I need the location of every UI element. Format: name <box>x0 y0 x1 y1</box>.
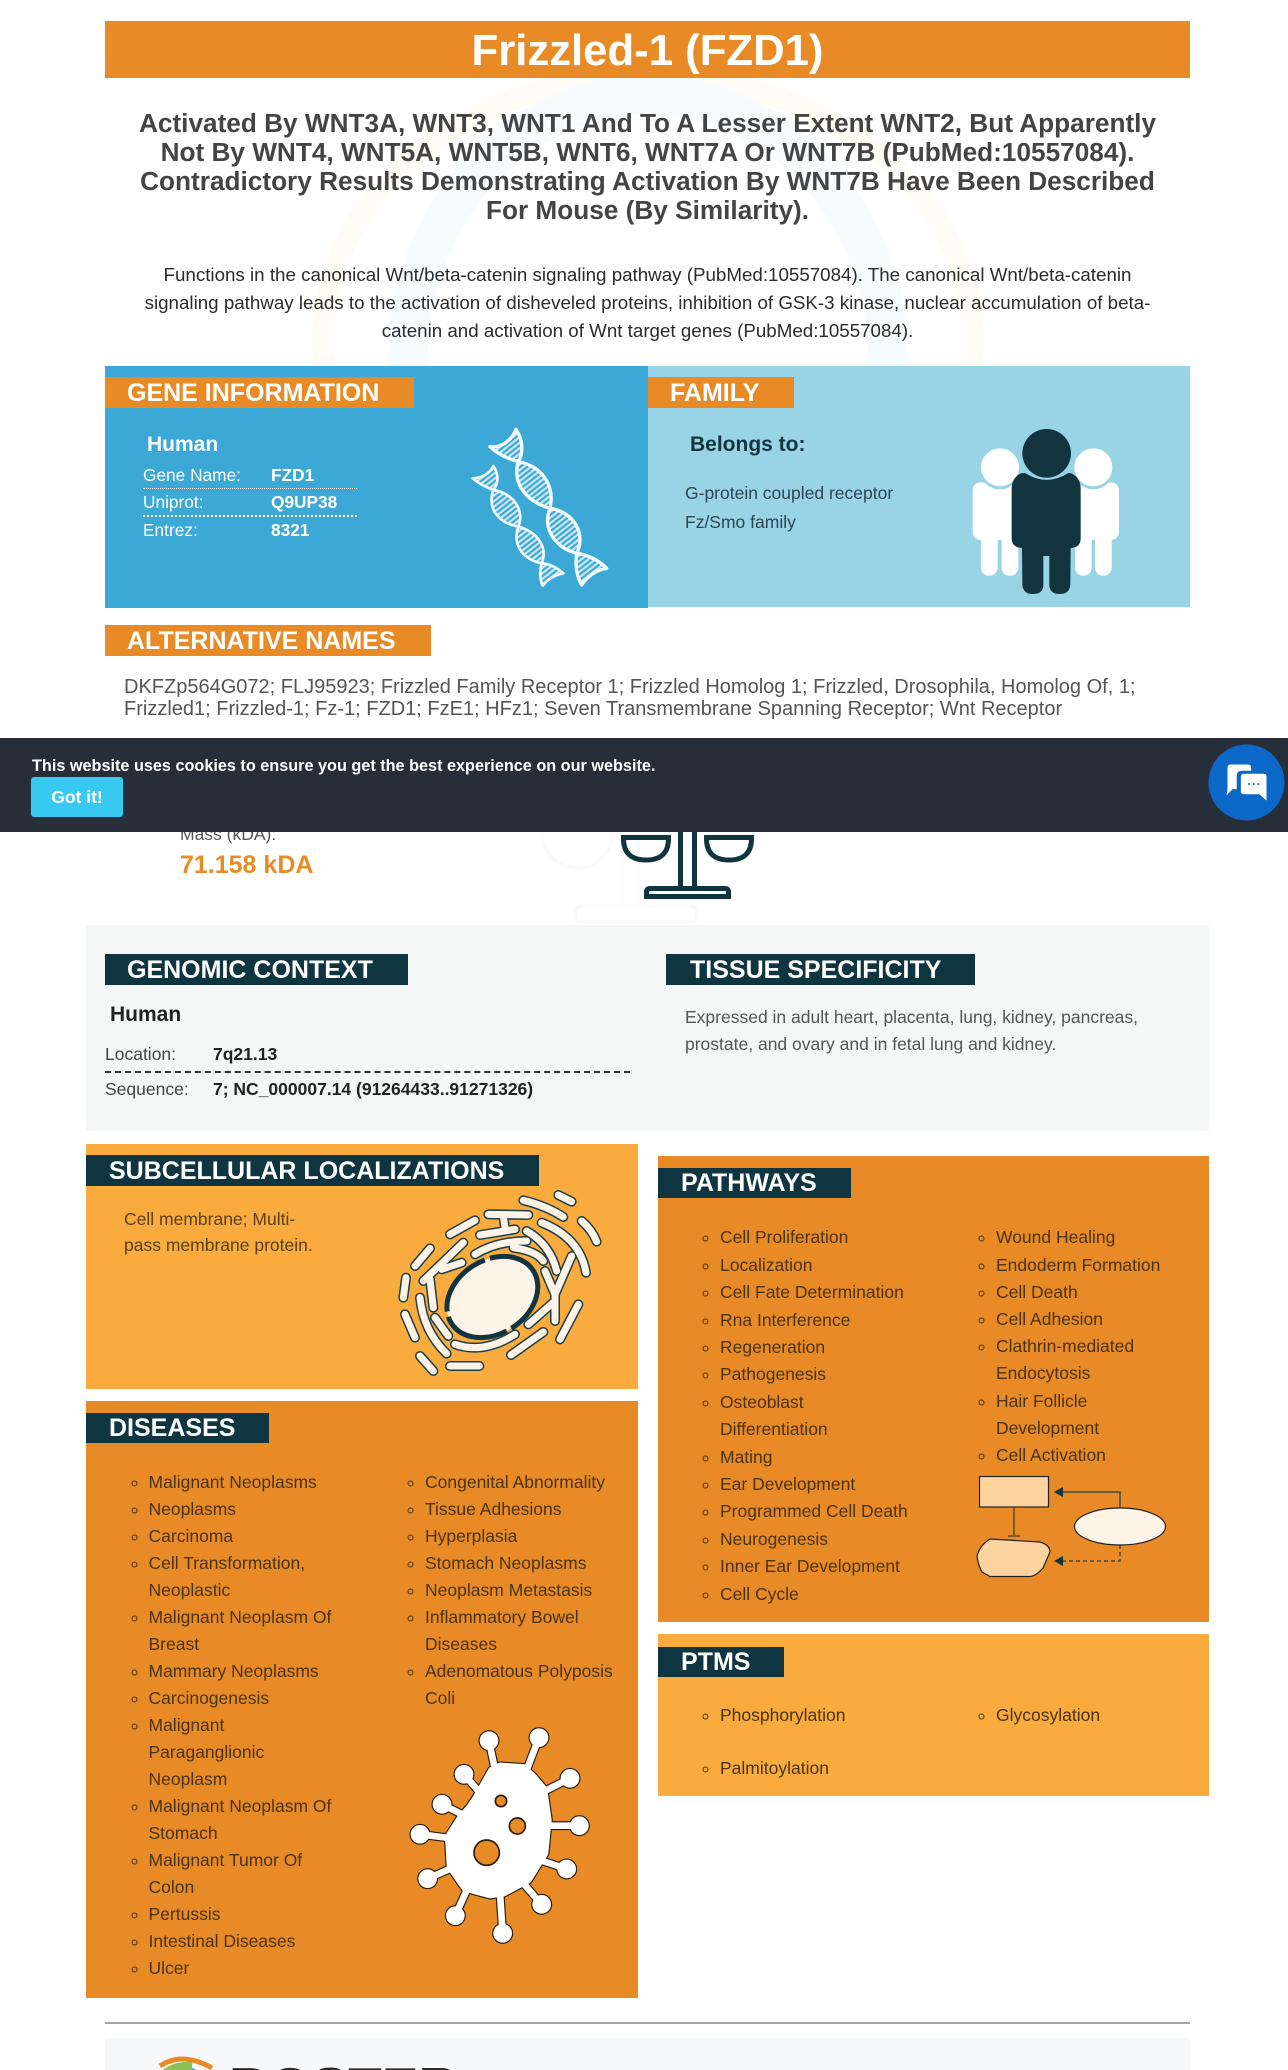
icon: endoplasmic reticulum and nucleus <box>398 1190 602 1376</box>
uniprot row: Q9UP38 <box>271 492 337 512</box>
disease list column one: Ulcer <box>148 1958 189 1978</box>
PTM list column one <box>702 1705 846 1778</box>
pathway list column one <box>702 1227 908 1604</box>
family list: G-protein coupled receptor <box>685 483 893 503</box>
background watermark logo <box>312 78 984 366</box>
disease list column two: Diseases <box>425 1634 497 1654</box>
pathway list column one: Regeneration <box>720 1337 825 1357</box>
panel: PTMs <box>658 1634 1209 1796</box>
panel: diseases <box>86 1401 638 1998</box>
pathway list column two: Cell Adhesion <box>996 1309 1103 1329</box>
cookie message: This website uses cookies to ensure you get the best experience on our website. <box>32 757 655 775</box>
pathway list column two <box>978 1227 1160 1465</box>
pathway list column two: Cell Activation <box>996 1445 1106 1465</box>
disease list column one: Neoplastic <box>148 1580 230 1600</box>
heading: gene information: GENE INFORMATION <box>127 379 379 407</box>
heading: pathways: PATHWAYS <box>681 1169 817 1197</box>
sequence row <box>105 1071 630 1105</box>
pathway list column two: Endoderm Formation <box>996 1254 1160 1274</box>
family list: Fz/Smo family <box>685 512 796 532</box>
heading: PTMs: PTMS <box>681 1648 750 1676</box>
heading: family <box>648 377 794 408</box>
gene name row: FZD1 <box>271 465 314 485</box>
alternative names text <box>124 676 1136 720</box>
disease list column one: Malignant Neoplasm Of <box>148 1796 331 1816</box>
molecular mass value: 71.158 kDA <box>180 851 313 879</box>
icon: company logo <box>158 2056 214 2070</box>
disease list column one: Paraganglionic <box>148 1742 264 1762</box>
subtitle heading: For Mouse (By Similarity). <box>486 195 809 225</box>
disease list column two <box>408 1472 613 1708</box>
PTM list column one: Palmitoylation <box>720 1758 829 1778</box>
heading: pathways <box>658 1168 851 1198</box>
pathway list column two: Endocytosis <box>996 1363 1090 1383</box>
pathway list column one: Cell Cycle <box>720 1584 799 1604</box>
uniprot row: Uniprot: <box>143 492 204 512</box>
disease list column one: Intestinal Diseases <box>148 1931 295 1951</box>
icon: faint balance watermark <box>530 800 730 930</box>
panel: gene information <box>105 366 648 608</box>
disease list column one: Colon <box>148 1877 194 1897</box>
species label: Human <box>110 1003 181 1026</box>
description paragraph: catenin and activation of Wnt target genes (PubMed:10557084). <box>382 320 913 341</box>
pathway list column two: Development <box>996 1418 1099 1438</box>
heading: PTMs <box>658 1647 784 1677</box>
icon: chat bubble <box>1208 744 1284 820</box>
disease list column one: Breast <box>148 1634 199 1654</box>
footer divider <box>105 2022 1190 2024</box>
gene name row: Gene Name: <box>143 465 241 485</box>
panel: subcellular localizations <box>86 1144 638 1389</box>
disease list column two: Tissue Adhesions <box>425 1499 562 1519</box>
pathway list column two: Cell Death <box>996 1282 1078 1302</box>
disease list column two: Congenital Abnormality <box>425 1472 605 1492</box>
location row: Location: <box>105 1044 176 1064</box>
disease list column one: Malignant Neoplasm Of <box>148 1607 331 1627</box>
icon: virus <box>410 1727 590 1944</box>
disease list column two: Neoplasm Metastasis <box>425 1580 592 1600</box>
heading: diseases <box>86 1413 269 1443</box>
heading: diseases: DISEASES <box>109 1414 235 1442</box>
pathway list column one: Mating <box>720 1447 773 1467</box>
localization text: Cell membrane; Multi- <box>124 1209 295 1229</box>
localization text <box>124 1209 313 1255</box>
disease list column one: Carcinoma <box>148 1526 233 1546</box>
pathway list column one: Cell Proliferation <box>720 1227 848 1247</box>
uniprot row <box>143 491 357 517</box>
species label: Human <box>147 433 218 456</box>
alternative names text: DKFZp564G072; FLJ95923; Frizzled Family Receptor 1; Frizzled Homolog 1; Frizzled, Drosophila, Homolog Of, 1; <box>124 676 1136 698</box>
heading: family: FAMILY <box>670 379 759 407</box>
disease list column one: Mammary Neoplasms <box>148 1661 319 1681</box>
description paragraph: signaling pathway leads to the activation of disheveled proteins, inhibition of GSK-3 kinase, nuclear accumulation of beta- <box>145 292 1150 313</box>
icon: balance scale <box>621 832 754 899</box>
pathway list column one: Localization <box>720 1255 812 1275</box>
heading: tissue specificity: TISSUE SPECIFICITY <box>690 956 941 984</box>
disease list column one: Malignant <box>148 1715 224 1735</box>
title banner <box>105 21 1190 78</box>
subtitle heading: Activated By WNT3A, WNT3, WNT1 And To A Lesser Extent WNT2, But Apparently <box>139 108 1156 138</box>
cookie notice bar <box>0 738 1288 832</box>
heading: genomic context: GENOMIC CONTEXT <box>127 956 373 984</box>
disease list column two: Inflammatory Bowel <box>425 1607 579 1627</box>
tissue specificity text <box>685 1007 1138 1054</box>
panel: pathways <box>658 1156 1209 1622</box>
disease list column one: Malignant Tumor Of <box>148 1850 302 1870</box>
sequence row: Sequence: <box>105 1079 189 1099</box>
pathway list column two: Wound Healing <box>996 1227 1115 1247</box>
localization text: pass membrane protein. <box>124 1235 313 1255</box>
pathway list column one: Inner Ear Development <box>720 1556 900 1576</box>
heading: alternative names: ALTERNATIVE NAMES <box>127 627 396 655</box>
sequence row: 7; NC_000007.14 (91264433..91271326) <box>213 1079 533 1099</box>
pathway list column one: Osteoblast <box>720 1392 804 1412</box>
disease list column two: Adenomatous Polyposis <box>425 1661 613 1681</box>
location row <box>105 1044 277 1064</box>
disease list column one: Stomach <box>148 1823 218 1843</box>
alternative names text: Frizzled1; Frizzled-1; Fz-1; FZD1; FzE1; HFz1; Seven Transmembrane Spanning Receptor; Wnt Receptor <box>124 698 1062 720</box>
family list <box>685 483 893 532</box>
footer panel <box>105 2038 1190 2070</box>
icon: group of people <box>972 429 1119 594</box>
molecular mass label: Mass (kDA): <box>180 824 276 844</box>
pathway list column two: Clathrin-mediated <box>996 1336 1134 1356</box>
tissue specificity text: prostate, and ovary and in fetal lung and kidney. <box>685 1034 1056 1054</box>
pathway list column one: Ear Development <box>720 1474 855 1494</box>
pathway list column one: Neurogenesis <box>720 1529 828 1549</box>
entrez row: Entrez: <box>143 520 198 540</box>
heading: subcellular localizations: SUBCELLULAR LOCALIZATIONS <box>109 1157 504 1185</box>
disease list column two: Stomach Neoplasms <box>425 1553 586 1573</box>
pathway diagram <box>976 1476 1166 1578</box>
PTM list column one: Phosphorylation <box>720 1705 846 1725</box>
panel: genomic context and tissue specificity <box>86 925 1209 1131</box>
disease list column one: Neoplasms <box>148 1499 236 1519</box>
disease list column one: Carcinogenesis <box>148 1688 269 1708</box>
PTM list column two: Glycosylation <box>996 1705 1100 1725</box>
pathway list column one: Differentiation <box>720 1419 828 1439</box>
description paragraph: Functions in the canonical Wnt/beta-catenin signaling pathway (PubMed:10557084). The canonical Wnt/beta-catenin <box>164 264 1131 285</box>
disease list column one: Cell Transformation, <box>148 1553 305 1573</box>
disease list column one: Neoplasm <box>148 1769 227 1789</box>
entrez row <box>143 520 309 540</box>
pathway list column one: Rna Interference <box>720 1310 850 1330</box>
pathway list column two: Hair Follicle <box>996 1391 1087 1411</box>
panel: family <box>648 366 1190 607</box>
subtitle heading: Contradictory Results Demonstrating Activation By WNT7B Have Been Described <box>140 166 1155 196</box>
entrez row: 8321 <box>271 520 309 540</box>
disease list column two: Coli <box>425 1688 455 1708</box>
pathway list column one: Cell Fate Determination <box>720 1282 904 1302</box>
tissue specificity text: Expressed in adult heart, placenta, lung, kidney, pancreas, <box>685 1007 1138 1027</box>
subtitle heading: Not By WNT4, WNT5A, WNT5B, WNT6, WNT7A Or WNT7B (PubMed:10557084). <box>161 137 1134 167</box>
cookie button: Got it! <box>51 787 103 807</box>
disease list column one <box>132 1472 332 1978</box>
pathway list column one: Programmed Cell Death <box>720 1501 908 1521</box>
pathway list column one: Pathogenesis <box>720 1364 826 1384</box>
disease list column two: Hyperplasia <box>425 1526 517 1546</box>
title banner: Frizzled-1 (FZD1) <box>472 26 823 75</box>
description paragraph <box>145 264 1150 341</box>
belongs-to label: Belongs to: <box>690 433 806 456</box>
disease list column one: Pertussis <box>148 1904 220 1924</box>
panel: genomic context and tissue specificity: 7q21.13 <box>213 1044 277 1064</box>
cookie button <box>31 777 123 817</box>
icon: DNA helices <box>471 428 608 587</box>
disease list column one: Malignant Neoplasms <box>148 1472 317 1492</box>
gene name row <box>143 464 357 489</box>
subtitle heading <box>139 108 1156 225</box>
